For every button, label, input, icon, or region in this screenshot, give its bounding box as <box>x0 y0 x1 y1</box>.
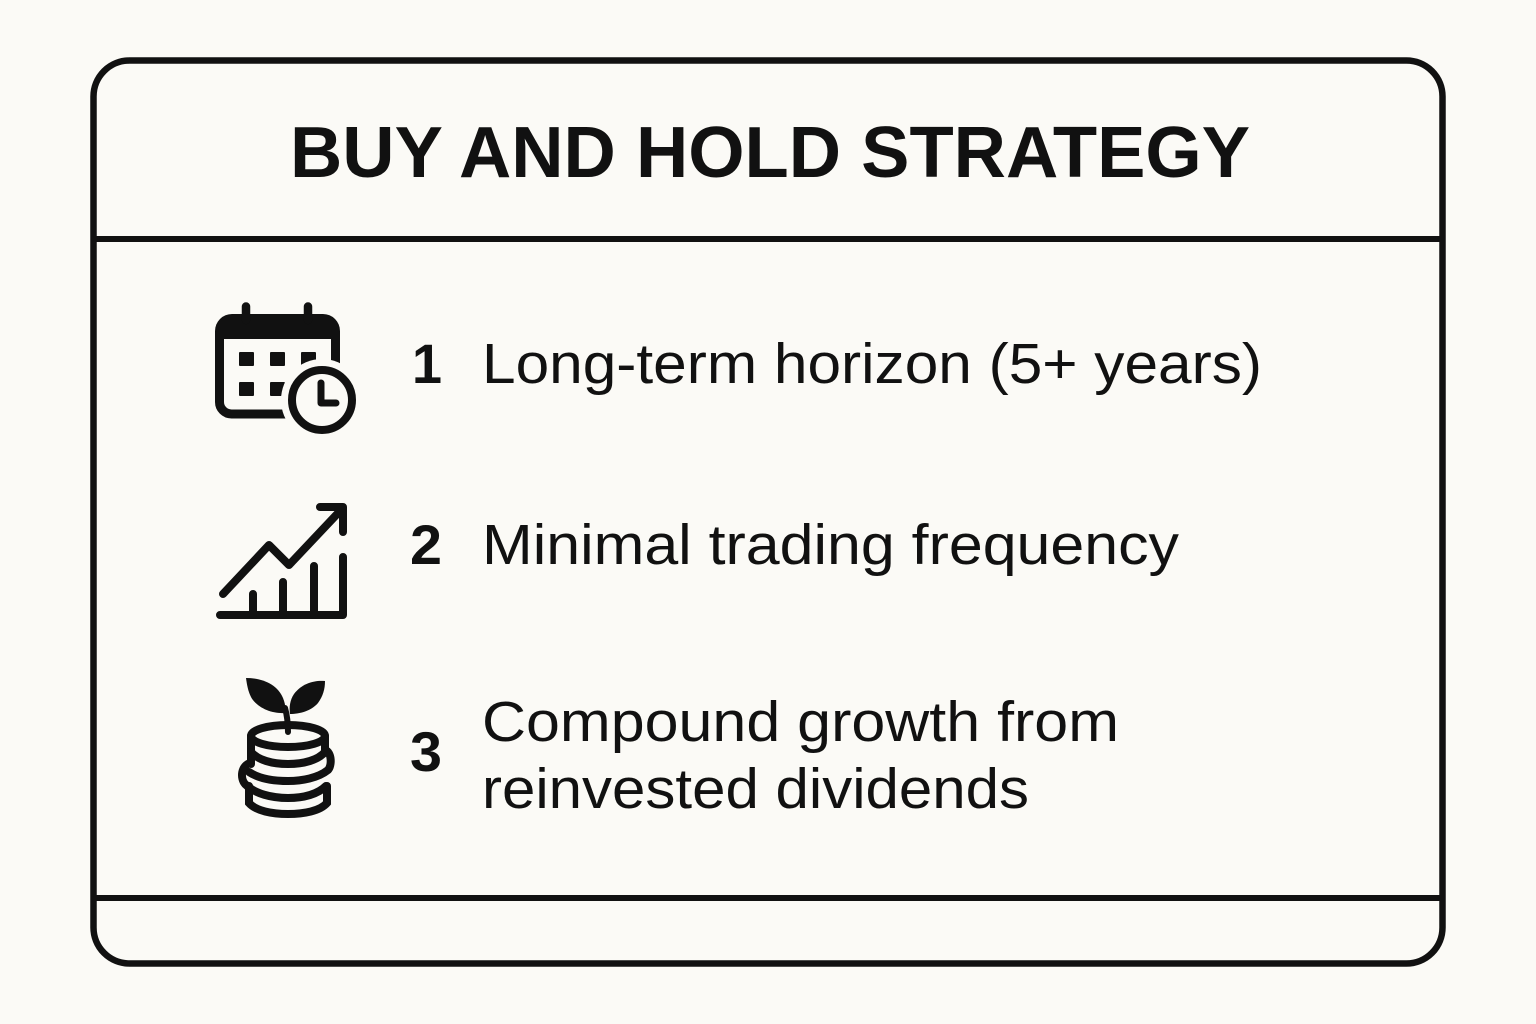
number 3: 3 <box>410 720 442 783</box>
number 1: 1 <box>412 332 442 395</box>
text: compound growth from reinvested dividends <box>482 690 1119 821</box>
icon: calendar with clock <box>215 306 363 441</box>
text: compound growth from reinvested dividends: Compound growth from <box>482 690 1119 754</box>
icon: growth chart with arrow <box>220 507 343 615</box>
text: minimal trading frequency: Minimal trading frequency <box>482 513 1180 577</box>
number 2: 2 <box>410 513 442 576</box>
title: BUY AND HOLD STRATEGY <box>290 113 1250 193</box>
icon: coin stack with sprout <box>242 678 331 814</box>
text: compound growth from reinvested dividends: reinvested dividends <box>482 757 1029 821</box>
text: long-term horizon: Long-term horizon (5+ years) <box>482 332 1262 396</box>
panel: main frame <box>93 60 1443 964</box>
